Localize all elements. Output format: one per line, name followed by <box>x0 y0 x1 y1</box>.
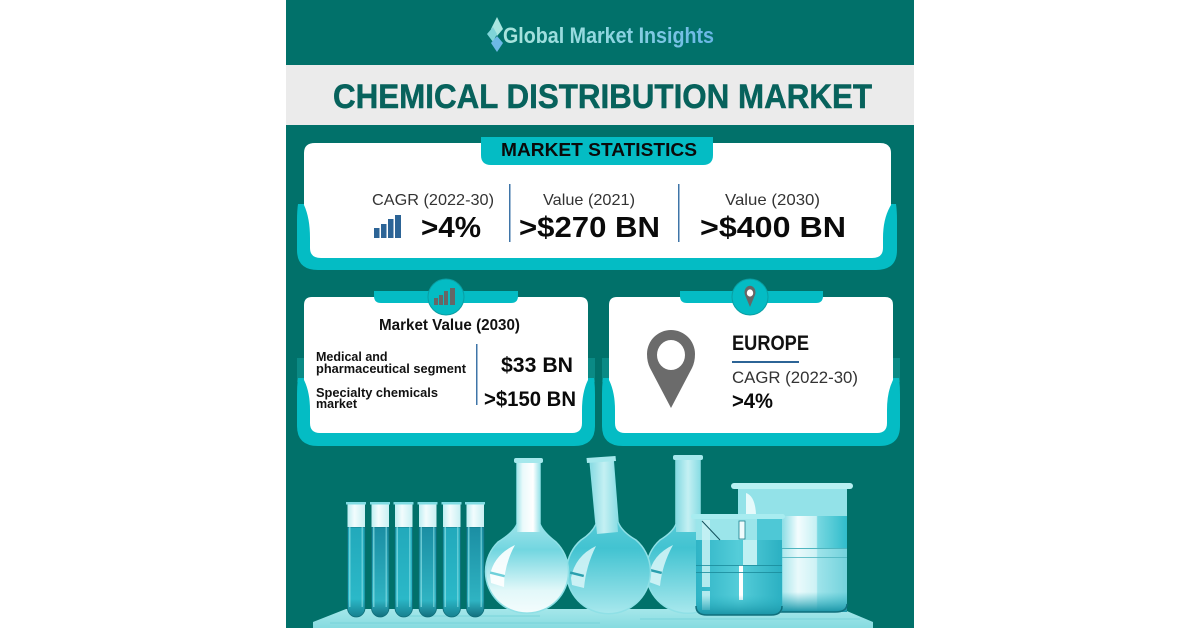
panel: Europe <box>602 279 900 446</box>
icon: location pin <box>647 330 695 408</box>
tab with chart icon <box>374 279 518 315</box>
stat: Europe CAGR: CAGR (2022-30) <box>732 368 858 387</box>
heading tab: market statistics: MARKET STATISTICS <box>501 139 697 160</box>
label: medical and pharmaceutical segment: pharmaceutical segment <box>316 362 467 376</box>
table <box>313 609 873 628</box>
stat: value 2021 <box>519 192 660 244</box>
stat: CAGR: >4% <box>421 212 481 244</box>
flask 2 <box>567 456 650 614</box>
stat: CAGR <box>372 192 494 244</box>
stat: value 2021: Value (2021) <box>543 192 635 209</box>
heading tab: market statistics <box>481 137 713 165</box>
large beaker <box>731 483 853 612</box>
test tubes <box>346 502 485 617</box>
logo: Global Market Insights: Global Market Insights <box>503 23 714 48</box>
flask 3 <box>646 455 730 613</box>
title band: CHEMICAL DISTRIBUTION MARKET <box>333 78 872 116</box>
heading: Europe: EUROPE <box>732 332 809 355</box>
stat: value 2021: >$270 BN <box>519 212 660 244</box>
stat: value 2030: >$400 BN <box>700 212 846 244</box>
small beaker <box>691 514 785 615</box>
stat: CAGR: CAGR (2022-30) <box>372 192 494 209</box>
title band <box>286 65 914 125</box>
tab with pin icon <box>680 279 823 315</box>
illustration: lab glassware <box>313 455 873 628</box>
panel: market value 2030 <box>297 279 595 446</box>
stat: value 2030 <box>700 192 846 244</box>
label: specialty chemicals market: Specialty chemicals <box>316 386 438 400</box>
heading: market value: Market Value (2030) <box>379 317 520 334</box>
value: >$150 BN: >$150 BN <box>484 388 576 411</box>
label: medical and pharmaceutical segment: Medical and <box>316 350 388 364</box>
value: $33 BN: $33 BN <box>501 354 573 377</box>
stat: value 2030: Value (2030) <box>725 192 820 209</box>
background panel <box>286 0 914 628</box>
label: specialty chemicals market: market <box>316 397 358 411</box>
value: >4%: >4% <box>732 390 773 413</box>
flask 1 <box>485 458 568 613</box>
logo: Global Market Insights <box>487 17 714 52</box>
panel: market statistics <box>297 137 897 270</box>
